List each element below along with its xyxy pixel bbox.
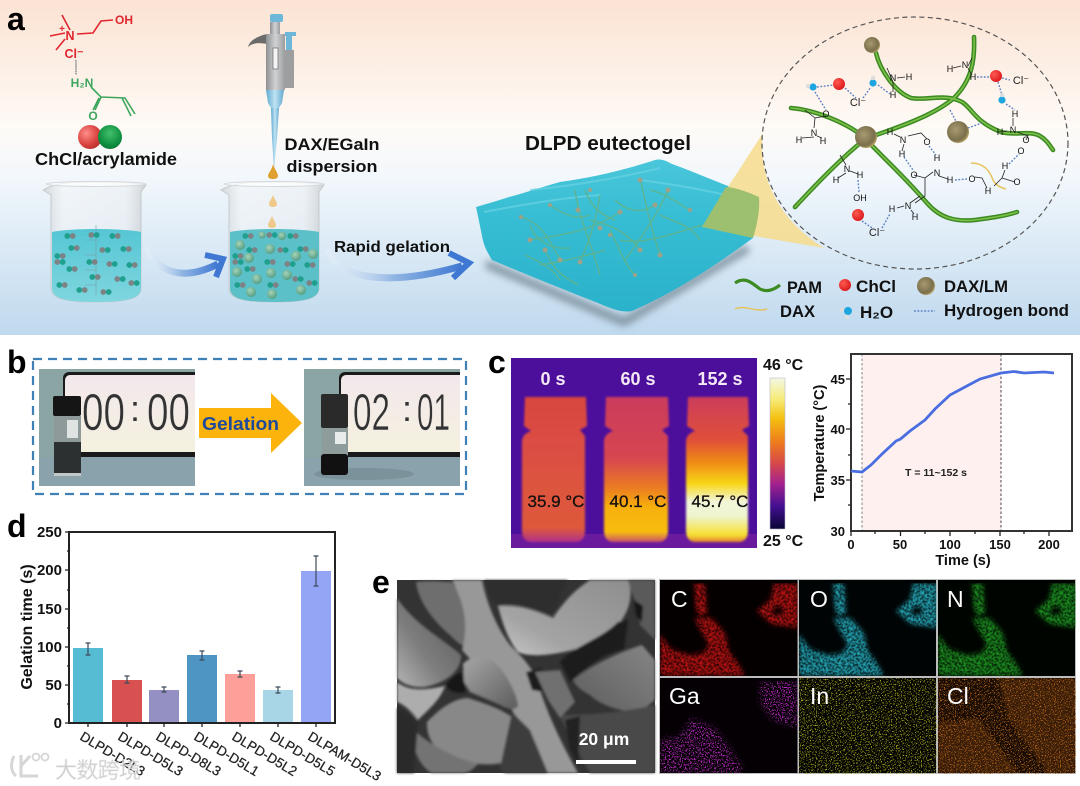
magnified network circle [762,17,1068,269]
DAX chain [971,163,1006,189]
thermal temperature readings: 40.1 °C [610,492,666,511]
thermal time labels: 60 s [620,369,656,389]
molecule: acrylamide [71,60,135,123]
droplets falling [268,195,277,228]
y tick labels: 35 [831,473,845,488]
atom labels: N [900,135,906,145]
annotation: T = 11~152 s [905,467,967,479]
label: Rapid gelation: Rapid gelation [334,239,450,256]
atom labels: H [1012,109,1018,119]
dashed frame [33,359,466,494]
molecule: choline chloride: Cl⁻ [64,47,84,61]
chemical bonds [802,58,1028,214]
axis title: Time: Time (s) [935,553,991,569]
atom labels: N [962,60,968,70]
map: Cl: Cl [947,683,969,709]
x category labels: DLPD-D5L3 [115,729,186,779]
panel label a: a [7,1,25,37]
thermal time labels: 152 s [697,369,743,389]
panel b: gelation photographs [7,344,471,494]
map: C: C [671,586,688,612]
dark void top [484,580,568,616]
map: N [938,580,1076,676]
atom labels: H [906,72,912,82]
legend: H₂O [860,303,893,322]
atom labels: H [857,170,863,180]
atom labels: OH [853,193,867,203]
y tick labels: 200 [37,562,62,579]
thermal vial 60 s [604,397,669,542]
x category labels: DLPD-D2L3 [77,729,148,779]
y tick labels: 100 [37,639,62,656]
hydrogen bonds [815,77,1019,228]
y tick labels: 50 [45,677,62,694]
atom labels: H [997,127,1003,137]
atom labels [796,60,1030,239]
molecule: choline chloride: + [59,24,65,35]
dark holes [560,620,628,682]
atom labels: O [1017,146,1025,156]
legend: DAX/LM [944,278,1008,296]
x category labels: DLPD-D5L1 [191,729,262,779]
label: DAX/EGaIn dispersion: DAX/EGaIn [284,135,380,154]
panel c: thermal images and temperature curve [488,344,1072,569]
beaker 2 [221,182,324,302]
arrow: Gelation: Gelation [202,414,279,434]
x tick labels: 0 [847,537,855,552]
atom labels: Cl⁻ [850,97,866,109]
temperature curve [851,372,1054,472]
panel label b: b [7,344,27,380]
atom labels: H [912,212,918,222]
elemental maps [659,579,1076,774]
x category labels: DLPAM-D5L3 [305,729,384,784]
x tick labels: 100 [939,537,961,552]
colour bar [763,357,804,550]
legend: PAM [787,279,822,297]
atom labels: Cl⁻ [869,227,885,239]
atom labels: N [905,201,911,211]
DAX/LM spheres [855,37,969,148]
label: DAX/EGaIn dispersion [284,135,380,176]
atom labels: H [947,175,953,185]
far left cell [397,598,461,687]
panel d: gelation time bar chart [7,508,384,784]
atom labels: N [844,164,850,174]
map: O: O [810,586,828,612]
x category labels: DLPD-D5L2 [229,729,300,779]
legend [735,277,1069,322]
atom labels: N [1010,125,1016,135]
atom labels: N [811,128,817,138]
watermark: 大数跨境 [55,753,141,785]
label: DAX/EGaIn dispersion: dispersion [286,157,378,176]
x category labels: DLPD-D8L3 [153,729,224,779]
map: In: In [810,683,829,709]
map: N: N [947,586,964,612]
y tick labels [831,372,845,539]
icon: pipette [248,14,296,179]
atom labels: O [910,170,918,180]
atom labels: Cl⁻ [1013,75,1029,87]
beaker 1 [43,182,146,302]
atom labels: H [889,204,895,214]
thermal vial 0 s [522,397,587,542]
atom labels: N [890,73,896,83]
atom labels: H [890,90,896,100]
right cell [573,645,655,712]
photo: 02:01 [304,369,471,486]
molecule: acrylamide: H₂N [71,76,93,90]
atom labels: H [970,72,976,82]
right lower [560,705,655,773]
atom labels: H [820,136,826,146]
atom labels: O [923,137,931,147]
map: Cl [938,678,1076,774]
y tick labels: 0 [54,715,62,732]
label: ChCl/acrylamide: ChCl/acrylamide [35,149,177,169]
molecule: choline chloride: OH [115,13,133,27]
map: Ga: Ga [669,683,700,709]
y tick labels: 30 [831,524,845,539]
y tick labels: 45 [831,372,845,387]
atom labels: H [833,175,839,185]
x tick labels [847,537,1060,552]
photo: 00:00 [39,369,205,486]
molecule: choline chloride [50,13,133,61]
gel block [476,159,759,322]
arrow: beaker 1 to beaker 2 [147,247,223,277]
map: In [799,678,937,774]
photo: 02:01: 02 [353,384,390,442]
legend: DAX [780,303,815,321]
atom labels: O [822,109,830,119]
x tick labels: 150 [989,537,1011,552]
x tick labels: 50 [893,537,907,552]
photo: 00:00: 00 [82,384,125,442]
molecule: choline chloride: N [65,29,75,43]
axis title: Temperature: Temperature (°C) [812,384,828,501]
small hole [446,672,466,693]
atom labels: H [985,186,991,196]
thermal vial 152 s [686,397,749,542]
legend: Hydrogen bond [944,302,1069,320]
atom labels: H [934,153,940,163]
scale bar [576,729,636,764]
panel label c: c [488,344,506,380]
atom labels: N [934,168,940,178]
map: O [799,580,937,676]
top right detail [628,580,655,640]
thermal temperature readings [528,492,748,511]
thermal temperature readings: 35.9 °C [528,492,584,511]
x category labels [77,729,384,784]
lower cell [427,698,521,764]
y tick labels: 250 [37,524,62,541]
scale bar: 20 μm [579,729,629,749]
thermal time labels [540,369,743,389]
bars [73,571,331,722]
axis title: Gelation time (s) [19,564,36,690]
atom labels: H [887,127,893,137]
photo: 02:01: : [402,388,412,429]
error bars [86,556,318,693]
thermal time labels: 0 s [540,369,566,389]
ChCl dots [833,70,1002,221]
thermal temperature readings: 45.7 °C [692,492,748,511]
upper middle cell [463,657,518,709]
line chart: temperature vs time [812,354,1072,569]
SEM micrograph [397,580,655,773]
atom labels: O [1022,135,1030,145]
arrow: Gelation [199,393,302,453]
molecule: acrylamide: O [88,109,98,123]
atom labels: H [1002,161,1008,171]
colour bar: 25 °C [763,533,804,550]
atom labels: H [899,149,905,159]
watermark [12,753,141,785]
thermal image [511,358,757,548]
photo: 00:00: 00 [147,384,190,442]
arrow: to gel [328,250,469,278]
PAM strands [791,37,1053,220]
y tick labels: 40 [831,422,845,437]
x tick labels: 200 [1038,537,1060,552]
y tick labels: 150 [37,601,62,618]
photo: 00:00: : [130,388,140,429]
atom labels: O [1013,177,1021,187]
photo: 02:01: 01 [417,384,450,442]
label: DLPD eutectogel: DLPD eutectogel [525,133,691,155]
panel label e: e [372,564,390,600]
panel a: synthesis schematic [0,0,1080,335]
panel label d: d [7,508,27,544]
x category labels: DLPD-D5L5 [267,729,338,779]
central ridge [452,580,578,773]
axes [65,532,335,727]
atom labels: H [796,135,802,145]
legend: ChCl [856,278,896,296]
zoom cone [702,133,824,248]
y tick labels [37,524,62,732]
icon: ChCl and acrylamide spheres [78,125,122,149]
map: C [660,580,798,676]
panel e: SEM and elemental maps [372,564,1076,774]
map: Ga [660,678,798,773]
atom labels: O [968,174,976,184]
atom labels: H [947,64,953,74]
water molecules [806,76,1006,104]
colour bar: 46 °C [763,357,804,374]
